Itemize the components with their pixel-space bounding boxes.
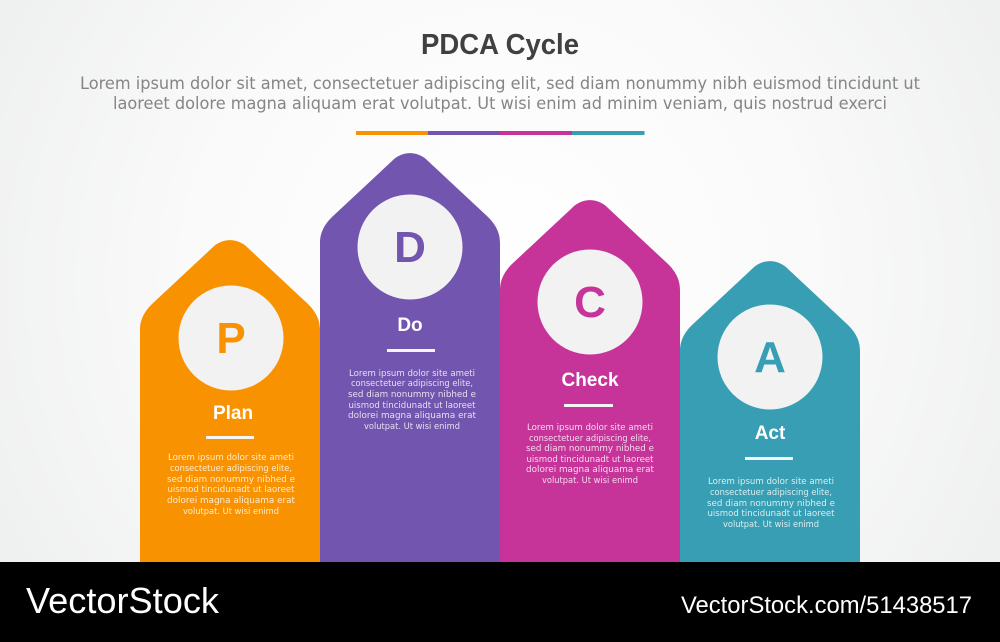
text block: Check: consectetuer adipiscing elite, [529, 434, 651, 444]
title: PDCA Cycle [421, 29, 579, 61]
text block: Do: sed diam nonummy nibhed e [348, 390, 476, 400]
text block: Do: consectetuer adipiscing elite, [351, 379, 473, 389]
subtitle text: laoreet dolore magna aliquam erat volutpat. Ut wisi enim ad minim veniam, quis nostrud exerci [113, 94, 887, 113]
icon: letter A circle [718, 304, 822, 410]
text block: Check: uismod tincidunadt ut laoreet [526, 455, 654, 465]
four-colour divider [356, 131, 644, 135]
text block: Check [526, 423, 655, 486]
text block: Plan [167, 453, 296, 517]
text block: Check: volutpat. Ut wisi enimd [542, 476, 638, 486]
text block: Act: consectetuer adipiscing elite, [710, 488, 832, 498]
rule: Act [745, 457, 793, 460]
rule: Plan [206, 436, 254, 439]
text block: Do: volutpat. Ut wisi enimd [364, 422, 460, 432]
text block: Check: sed diam nonummy nibhed e [526, 444, 654, 454]
icon: letter D circle [358, 194, 462, 300]
panel: Plan [140, 240, 320, 562]
text block: Check: Lorem ipsum dolor site ameti [527, 423, 653, 433]
text block: Do: Lorem ipsum dolor site ameti [349, 369, 475, 379]
panel: Do [320, 153, 500, 562]
text block: Plan: volutpat. Ut wisi enimd [183, 507, 279, 517]
text block: Plan: Lorem ipsum dolor site ameti [168, 453, 294, 463]
icon: letter A circle: A [754, 333, 786, 382]
heading: Act: Act [755, 423, 786, 444]
text block: Plan: sed diam nonummy nibhed e [167, 475, 295, 485]
text block: Check: dolorei magna aliquama erat [526, 465, 655, 475]
icon: letter D circle: D [394, 223, 426, 272]
text block: Act [707, 477, 835, 530]
text block: Act: sed diam nonummy nibhed e [707, 499, 835, 509]
text block: Act: volutpat. Ut wisi enimd [723, 520, 819, 530]
subtitle text [80, 74, 921, 113]
icon: letter C circle: C [574, 278, 606, 327]
rule: Do [387, 349, 435, 352]
text block: Plan: dolorei magna aliquama erat [167, 496, 296, 506]
text block: Act: uismod tincidunadt ut laoreet [708, 509, 835, 519]
text block: Do [348, 369, 477, 432]
text block: Do: uismod tincidunadt ut laoreet [348, 401, 476, 411]
icon: letter C circle [538, 250, 642, 354]
icon: letter P circle [178, 286, 284, 390]
heading: Do: Do [397, 315, 423, 336]
subtitle text: Lorem ipsum dolor sit amet, consectetuer adipiscing elit, sed diam nonummy nibh euismod tincidunt ut [80, 74, 921, 93]
logo text: VectorStock [26, 580, 220, 621]
panel: Check [500, 200, 680, 562]
watermark bar [0, 562, 1000, 642]
image id text: VectorStock.com/51438517 [681, 592, 972, 619]
rule: Check [564, 404, 613, 407]
icon: letter P circle: P [216, 314, 246, 363]
panel: Act [680, 261, 860, 562]
text block: Do: dolorei magna aliquama erat [348, 411, 477, 421]
text block: Plan: consectetuer adipiscing elite, [170, 464, 292, 474]
text block: Act: Lorem ipsum dolor site ameti [708, 477, 834, 487]
text block: Plan: uismod tincidunadt ut laoreet [168, 485, 295, 495]
heading: Check: Check [561, 370, 619, 391]
heading: Plan: Plan [213, 403, 253, 424]
